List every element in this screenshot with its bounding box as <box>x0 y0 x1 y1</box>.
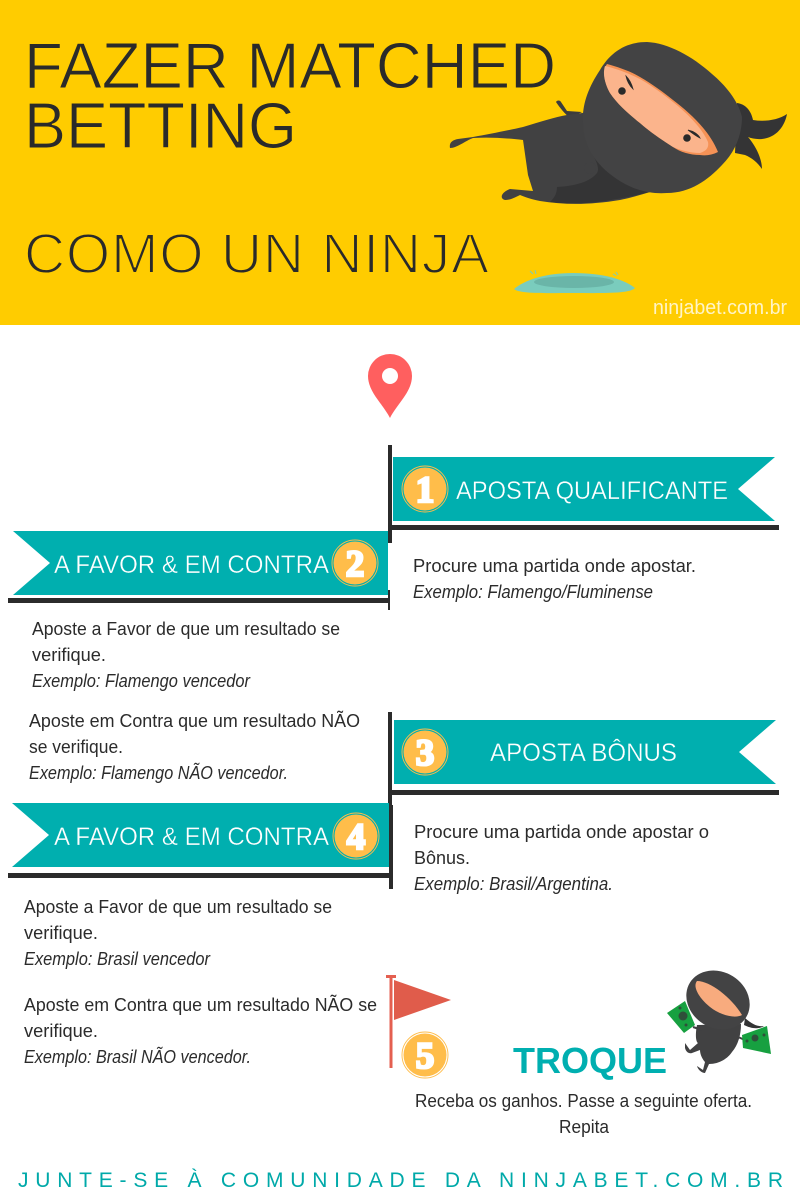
text: aposte a favor: verifique. <box>24 923 98 943</box>
ribbon label: APOSTA BÔNUS <box>490 738 677 767</box>
text: aposte a favor: Aposte a Favor de que um resultado se <box>32 619 340 639</box>
subtitle: COMO UN NINJA <box>24 222 489 286</box>
ribbon: aposta qualificante <box>393 457 775 521</box>
step 3 text: Procure uma partida onde apostar o <box>414 822 709 842</box>
text: aposte em contra: Aposte em Contra que um resultado NÃO se <box>24 994 377 1015</box>
text: aposte em contra: verifique. <box>24 1021 98 1041</box>
text: aposte em contra: se verifique. <box>29 737 123 757</box>
step 1 text: Procure uma partida onde apostar. <box>413 556 696 576</box>
ribbon label: A FAVOR & EM CONTRA <box>54 551 329 579</box>
icon: finish flag <box>386 975 451 1068</box>
text: aposte a favor <box>24 897 332 969</box>
text: receba os ganhos <box>415 1091 752 1137</box>
badge: number 3: 3 <box>416 733 434 774</box>
icon: banknote left <box>667 1001 695 1033</box>
badge: number 3 <box>402 729 448 775</box>
badge: number 4: 4 <box>347 817 365 858</box>
text: aposte a favor: Exemplo: Flamengo vencedor <box>32 671 251 691</box>
badge: number 2 <box>332 540 378 586</box>
icon: flying ninja <box>450 42 787 204</box>
text: aposte em contra <box>24 994 377 1067</box>
icon: puddle <box>514 270 635 293</box>
title: FAZER MATCHED <box>24 29 556 102</box>
badge: number 5: 5 <box>416 1036 434 1077</box>
step 3 text: Exemplo: Brasil/Argentina. <box>414 874 613 894</box>
step 1 <box>388 445 779 602</box>
step 3 text: Bônus. <box>414 848 470 868</box>
badge: number 1: 1 <box>416 470 434 511</box>
step 1 text: Exemplo: Flamengo/Fluminense <box>413 582 653 602</box>
step 5 <box>386 959 771 1137</box>
badge: number 5 <box>402 1032 448 1078</box>
badge: number 1 <box>402 466 448 512</box>
ribbon: a favor e em contra <box>13 531 388 595</box>
title: BETTING <box>24 89 297 162</box>
text: aposte a favor: Aposte a Favor de que um resultado se <box>24 897 332 917</box>
text: aposte em contra: Exemplo: Brasil NÃO vencedor. <box>24 1046 251 1067</box>
text: aposte em contra: Exemplo: Flamengo NÃO vencedor. <box>29 762 288 783</box>
ribbon label: APOSTA QUALIFICANTE <box>456 477 728 505</box>
panel: yellow header <box>0 0 800 325</box>
footer call to action: JUNTE-SE À COMUNIDADE DA NINJABET.COM.BR <box>18 1169 783 1192</box>
ribbon: a favor e em contra <box>12 803 389 867</box>
heading: troque: TROQUE <box>513 1040 667 1081</box>
text: aposte em contra: Aposte em Contra que um resultado NÃO <box>29 710 360 731</box>
text: aposte a favor: verifique. <box>32 645 106 665</box>
ribbon label: A FAVOR & EM CONTRA <box>54 823 329 851</box>
text: aposte a favor <box>32 619 340 691</box>
website label: ninjabet.com.br <box>653 297 787 319</box>
text: aposte em contra <box>29 710 360 783</box>
badge: number 2: 2 <box>346 544 364 585</box>
icon: ninja with money <box>667 959 771 1073</box>
icon: map pin <box>368 354 412 418</box>
step 3 <box>388 712 779 894</box>
title <box>24 29 556 162</box>
icon: banknote right <box>742 1026 771 1054</box>
text: aposte a favor: Exemplo: Brasil vencedor <box>24 949 211 969</box>
step 3 text <box>414 822 709 894</box>
text: receba os ganhos: Repita <box>559 1117 610 1137</box>
step 1 text <box>413 556 696 602</box>
step 4 <box>8 803 393 1067</box>
badge: number 4 <box>333 813 379 859</box>
step 2 <box>8 531 390 783</box>
ribbon: aposta bonus <box>394 720 776 784</box>
text: receba os ganhos: Receba os ganhos. Passe a seguinte oferta. <box>415 1091 752 1111</box>
